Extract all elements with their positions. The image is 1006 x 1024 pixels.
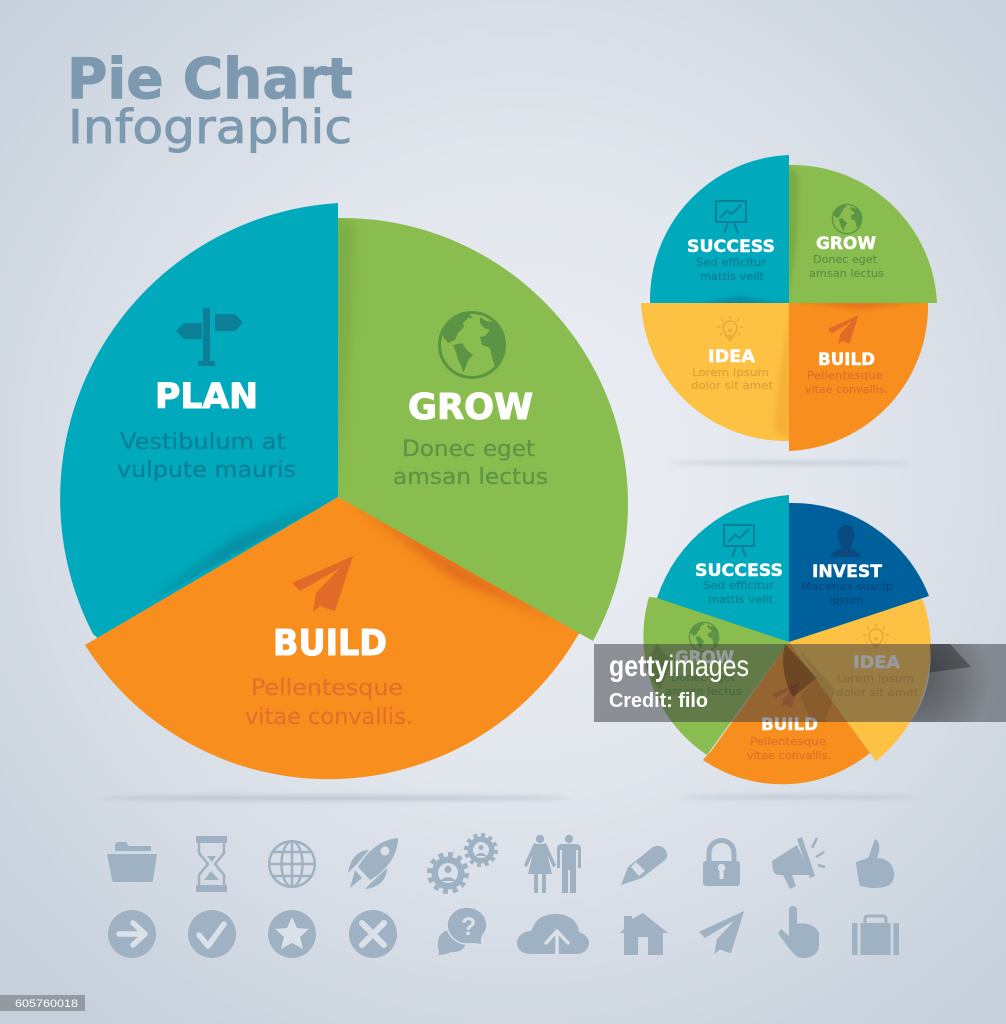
label: idea: IDEA xyxy=(708,347,755,366)
label: success: SUCCESS xyxy=(687,237,775,256)
ground shadow: small pie top xyxy=(670,461,910,465)
text: idea description: Lorem ipsum xyxy=(692,366,769,379)
text: grow description: Donec eget xyxy=(402,437,535,462)
text: invest description: ipsum. xyxy=(829,594,867,607)
text: grow description xyxy=(665,671,742,698)
slice: idea xyxy=(789,596,931,761)
text: plan description: Vestibulum at xyxy=(120,430,286,455)
icon: paper plane xyxy=(828,315,858,344)
icon: check circle xyxy=(188,910,236,958)
watermark band xyxy=(594,644,1006,722)
label: grow: GROW xyxy=(408,387,533,428)
icon: speech bubbles: ? xyxy=(461,913,476,941)
text: success description xyxy=(696,256,766,283)
title line: Infographic: Infographic xyxy=(68,100,352,154)
text: success description: mattis velit xyxy=(700,270,765,283)
panel: small pie chart, four slices xyxy=(641,155,937,451)
text: invest description xyxy=(801,580,893,607)
text: grow description: amsan lectus xyxy=(393,465,548,490)
text: build description xyxy=(805,369,888,396)
text: grow description xyxy=(809,253,884,280)
label: invest: INVEST xyxy=(812,562,883,581)
icon: padlock xyxy=(703,840,740,886)
text: idea description: Lorem ipsum xyxy=(837,672,914,685)
icon: pencil xyxy=(621,846,667,885)
text: build description: Pellentesque xyxy=(251,676,403,701)
icon: arrow circle xyxy=(108,910,156,958)
icon: megaphone xyxy=(772,837,825,889)
icon: hourglass xyxy=(196,836,227,892)
slice: success xyxy=(657,495,789,642)
icon: couple xyxy=(526,835,581,893)
label: grow: GROW xyxy=(675,648,734,667)
text: idea description xyxy=(836,672,919,699)
text: plan description: vulpute mauris xyxy=(117,458,296,483)
slice: grow xyxy=(643,597,789,755)
slice: idea xyxy=(641,303,789,441)
image id tag: 605760018 xyxy=(15,998,78,1010)
text: plan description xyxy=(117,430,296,483)
text: build description: vitae convallis. xyxy=(747,749,831,762)
watermark logo text: gettyimages xyxy=(609,650,749,683)
slice: build xyxy=(789,303,928,451)
icon: person xyxy=(830,525,861,557)
icon: paper plane xyxy=(292,556,353,612)
icon: house xyxy=(620,913,668,955)
slice: plan xyxy=(60,203,338,640)
text: grow description: Donec eget xyxy=(671,671,736,684)
slice: grow xyxy=(338,218,628,641)
panel: small pie chart, five slices xyxy=(643,495,931,784)
label: build: BUILD xyxy=(818,350,875,369)
text: success description: Sed efficitur xyxy=(703,579,775,592)
label: build: BUILD xyxy=(273,623,387,664)
icon: rocket xyxy=(348,838,398,889)
title xyxy=(67,47,353,154)
icon: paper plane xyxy=(699,911,744,954)
slice: build xyxy=(85,497,585,779)
icon: signpost xyxy=(176,308,243,366)
panel: large pie chart xyxy=(60,203,628,779)
text: grow description xyxy=(393,437,548,490)
text: idea description: dolor sit amet xyxy=(691,379,774,392)
icon: globe xyxy=(832,204,862,234)
icon: wire globe xyxy=(269,841,315,887)
slice: invest xyxy=(789,503,929,642)
ground shadow: small pie bottom xyxy=(680,795,920,799)
text: grow description: amsan lectus xyxy=(809,267,884,280)
icon: star circle xyxy=(268,910,316,958)
icon: light bulb xyxy=(717,316,743,340)
ground shadow: large pie xyxy=(100,796,570,800)
image id tag xyxy=(0,995,85,1011)
text: grow description: amsan lectus xyxy=(665,685,742,698)
text: build description xyxy=(747,735,831,762)
slice: success xyxy=(650,155,789,303)
text: build description xyxy=(245,676,413,730)
text: grow description: Donec eget xyxy=(813,253,878,266)
watermark credit: Credit: filo xyxy=(609,690,708,712)
text: build description: Pellentesque xyxy=(807,369,883,382)
icon: presentation board xyxy=(724,525,754,557)
label: success: SUCCESS xyxy=(695,561,783,580)
icon: thumbs up xyxy=(856,839,894,888)
slice: grow xyxy=(789,165,937,303)
label: plan: PLAN xyxy=(155,377,258,417)
text: build description: Pellentesque xyxy=(750,735,826,748)
label: build: BUILD xyxy=(761,715,818,734)
text: success description xyxy=(703,579,775,606)
icon row: bottom xyxy=(108,906,899,958)
text: invest description: Macenas suscip xyxy=(801,580,893,593)
icon: cross circle xyxy=(349,910,397,958)
text: idea description: dolor sit amet xyxy=(836,686,919,699)
text: success description: mattis velit xyxy=(708,593,774,606)
icon: folder xyxy=(107,842,157,882)
label: idea: IDEA xyxy=(853,653,900,672)
label: grow: GROW xyxy=(816,234,876,253)
icon row: top xyxy=(107,835,894,893)
icon: globe xyxy=(440,312,505,378)
icon: presentation board xyxy=(716,201,746,233)
icon: paper plane xyxy=(772,682,800,708)
title line: Pie Chart: Pie Chart xyxy=(67,47,353,112)
slice: build xyxy=(703,642,870,784)
icon: briefcase xyxy=(852,916,899,955)
icon: light bulb xyxy=(863,624,889,648)
icon: globe xyxy=(689,622,719,652)
icon: cloud upload xyxy=(517,914,589,954)
icon: gears xyxy=(430,835,496,892)
text: idea description xyxy=(691,366,774,392)
text: success description: Sed efficitur xyxy=(696,256,766,269)
text: build description: vitae convallis. xyxy=(805,383,888,396)
icon: pointing hand xyxy=(778,906,819,958)
icon: speech bubbles xyxy=(438,907,487,955)
text: build description: vitae convallis. xyxy=(245,705,413,730)
